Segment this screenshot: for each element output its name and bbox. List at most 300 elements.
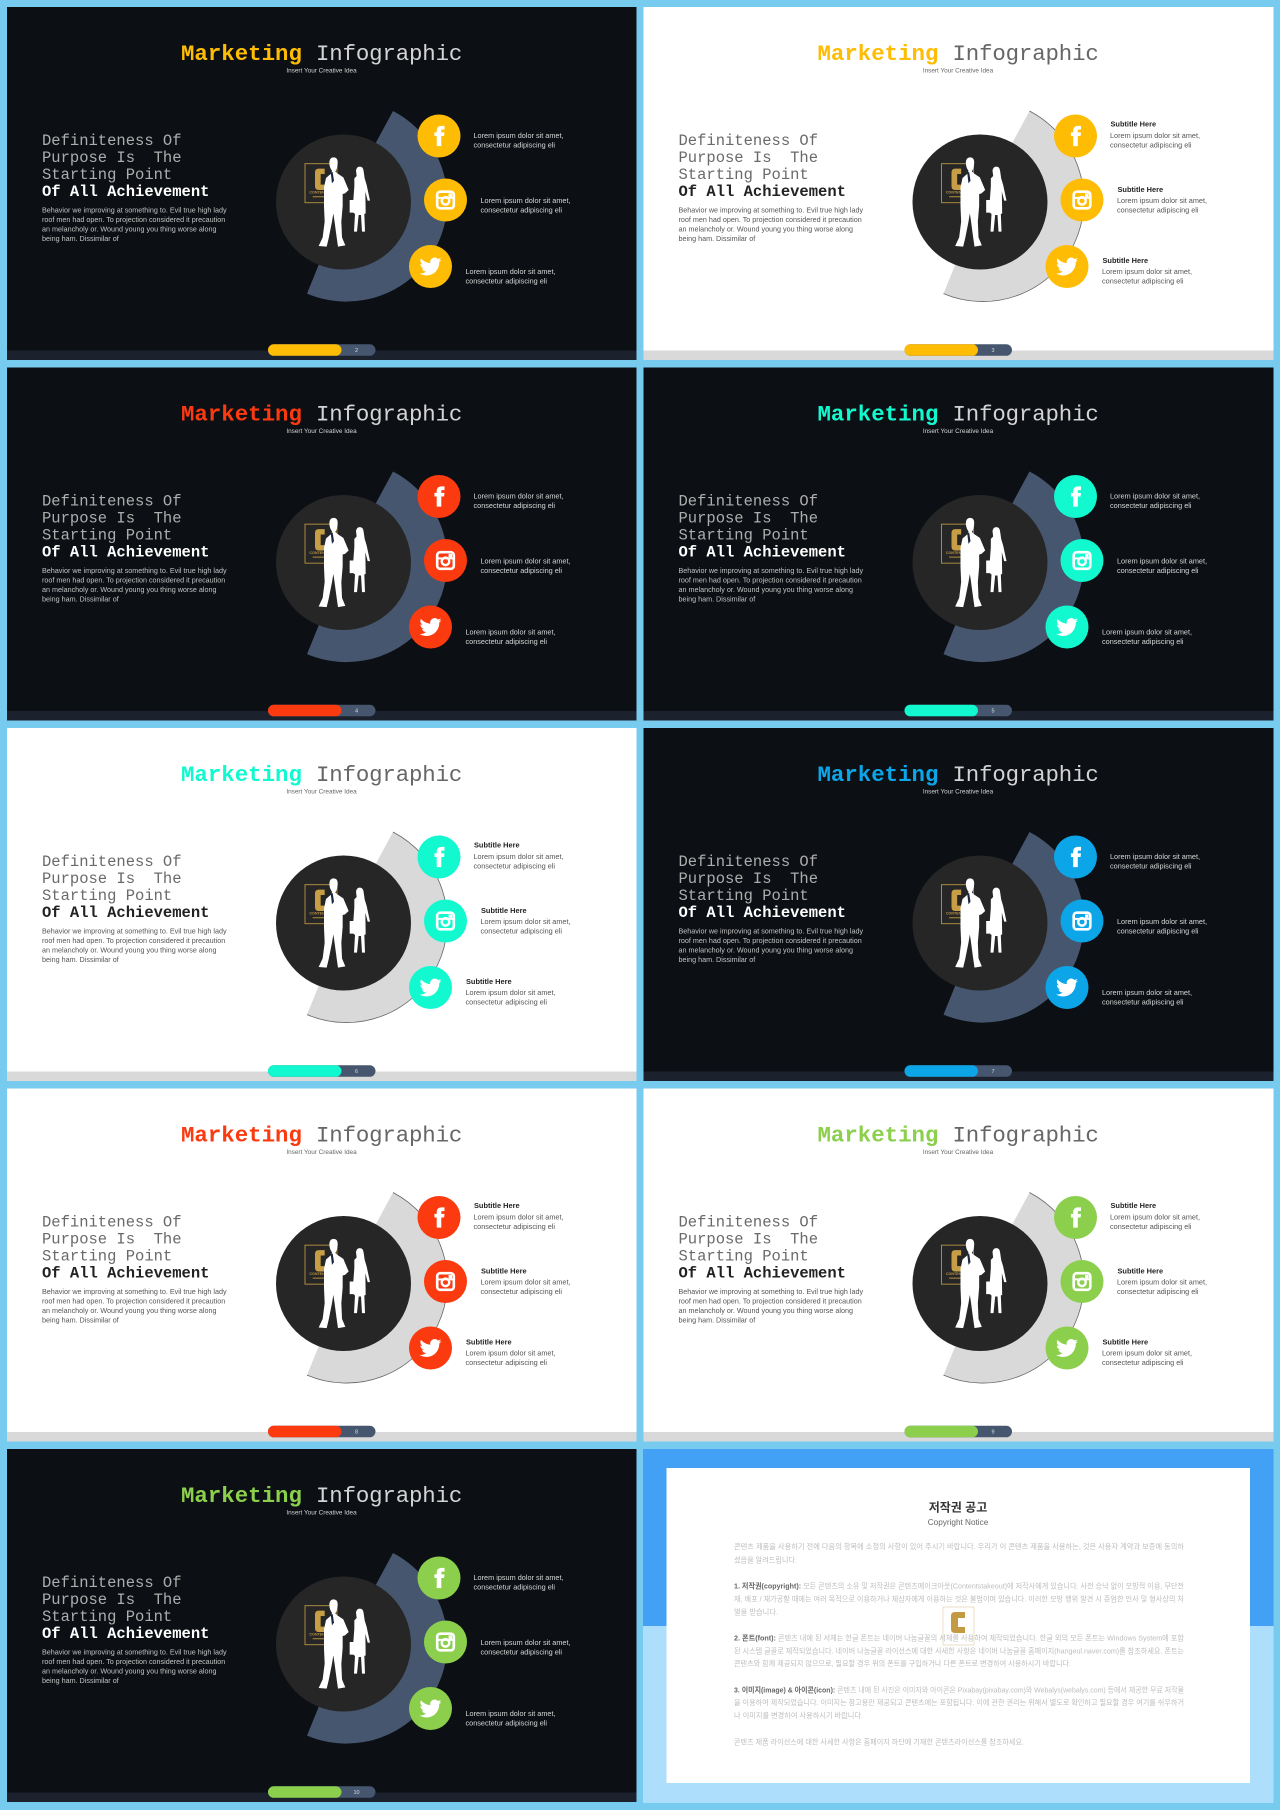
- title: Marketing: [818, 402, 938, 428]
- centre circle with people: [912, 856, 1048, 990]
- body text: Behavior we improving at something to. Evil true high lady: [678, 206, 863, 214]
- title: [818, 1122, 1099, 1156]
- item text 3: [1102, 256, 1192, 286]
- body text: Behavior we improving at something to. Evil true high lady: [42, 1287, 227, 1296]
- page pill: [268, 344, 376, 356]
- item text 3: [1102, 988, 1192, 1006]
- page pill: [268, 705, 376, 716]
- item text 3: Lorem ipsum dolor sit amet,: [466, 267, 556, 276]
- item text 2: Subtitle Here: [1118, 1266, 1163, 1276]
- page pill: [904, 705, 1012, 716]
- item text 1: consectetur adipiscing eli: [1110, 140, 1192, 150]
- arc sector: [307, 111, 447, 302]
- page pill: 7: [991, 1069, 995, 1075]
- item text 1: Lorem ipsum dolor sit amet,: [1110, 492, 1200, 500]
- title: [818, 402, 1099, 435]
- item text 3: Subtitle Here: [1102, 256, 1148, 265]
- body text: [42, 1648, 227, 1685]
- body text: roof men had open. To projection considered it precaution: [42, 1296, 225, 1306]
- item text 2: consectetur adipiscing eli: [1117, 926, 1199, 936]
- notice title: Copyright Notice: [928, 1518, 989, 1527]
- body text: an melancholy or. Wound young you thing worse along: [42, 585, 216, 594]
- item text 1: Lorem ipsum dolor sit amet,: [1110, 852, 1200, 861]
- item text 1: [474, 492, 564, 510]
- body text: being ham. Dissimilar of: [42, 1676, 119, 1685]
- title: Marketing: [181, 402, 302, 428]
- page pill: 4: [355, 708, 358, 714]
- slide 10: copyright notice: [643, 1449, 1274, 1803]
- icon: instagram: [424, 539, 467, 582]
- body text: [678, 566, 863, 604]
- item text 1: [1110, 492, 1200, 510]
- heading text: [678, 492, 846, 562]
- item text 2: consectetur adipiscing eli: [1117, 206, 1199, 214]
- notice body: 3. 이미지(image) & 아이콘(icon): 콘텐츠 내에 된 사진은 이미지와 아이콘은 Pixabay(pixabay.com)와 Webalys(webalys.com) 등에서 제공한 무료 저작물: [734, 1684, 1184, 1694]
- heading text: Of All Achievement: [678, 544, 846, 562]
- item text 1: consectetur adipiscing eli: [474, 140, 555, 150]
- icon: twitter: [1046, 1326, 1088, 1370]
- item text 2: [480, 556, 571, 575]
- page pill: 8: [355, 1430, 358, 1436]
- body text: [678, 1287, 863, 1324]
- body text: an melancholy or. Wound young you thing worse along: [42, 224, 216, 234]
- notice title: 저작권 공고: [929, 1500, 987, 1514]
- icon: facebook: [1054, 1196, 1097, 1239]
- title: [181, 1122, 462, 1156]
- icon: twitter: [1046, 245, 1088, 288]
- item text 1: Subtitle Here: [474, 1201, 520, 1210]
- body text: being ham. Dissimilar of: [678, 594, 755, 604]
- title: [181, 762, 462, 796]
- title: [818, 762, 1099, 796]
- item text 2: [1117, 185, 1207, 214]
- heading text: [42, 1214, 209, 1282]
- icon: instagram: [1060, 900, 1104, 942]
- icon: twitter: [409, 1687, 452, 1730]
- body text: Behavior we improving at something to. Evil true high lady: [42, 926, 227, 936]
- title: Marketing: [181, 762, 302, 788]
- slide 7: light red: [7, 1088, 636, 1442]
- body text: roof men had open. To projection considered it precaution: [678, 936, 862, 945]
- item text 3: consectetur adipiscing eli: [466, 276, 547, 286]
- title: Insert Your Creative Idea: [923, 428, 994, 435]
- item text 1: Lorem ipsum dolor sit amet,: [474, 492, 564, 500]
- notice body: 콘텐츠 제품을 사용하기 전에 다음의 항목에 소정의 사항이 있어 주시기 바랍니다. 우리가 이 콘텐츠 제품을 사용하는, 것은 사용자 계약과 보증에 동의하: [734, 1541, 1184, 1551]
- item text 1: Lorem ipsum dolor sit amet,: [1110, 1212, 1200, 1222]
- heading text: Purpose Is The: [42, 870, 182, 888]
- notice body: 콘텐츠와 함께 제공되지 않으므로, 필요할 경우 위의 폰트를 구입하거나 다른 폰트로 변경하여 사용하시기 바랍니다.: [734, 1658, 1071, 1668]
- heading text: [678, 132, 846, 201]
- item text 2: Lorem ipsum dolor sit amet,: [480, 1278, 571, 1286]
- page pill: 9: [991, 1430, 995, 1436]
- page pill: [904, 1065, 1012, 1077]
- item text 3: Lorem ipsum dolor sit amet,: [466, 628, 556, 636]
- heading text: [42, 853, 209, 922]
- heading text: Definiteness Of: [42, 1574, 182, 1592]
- item text 2: consectetur adipiscing eli: [480, 566, 562, 575]
- icon: instagram: [1060, 539, 1104, 582]
- item text 3: [1102, 1338, 1192, 1367]
- title: Insert Your Creative Idea: [923, 68, 994, 74]
- notice body: 벌을 받습니다.: [734, 1606, 778, 1616]
- item text 1: consectetur adipiscing eli: [1110, 862, 1192, 870]
- item text 1: Lorem ipsum dolor sit amet,: [474, 131, 564, 140]
- notice body: 콘텐츠 제품 라이선스에 대한 사세한 사항은 홈페이지 하단에 기재한 콘텐츠라이선스를 참조하세요.: [734, 1736, 1024, 1746]
- heading text: Starting Point: [42, 1608, 172, 1626]
- icon: facebook: [1054, 114, 1097, 158]
- heading text: Purpose Is The: [42, 149, 182, 167]
- icon: facebook: [1054, 475, 1097, 518]
- item text 3: Subtitle Here: [466, 977, 512, 986]
- heading text: Purpose Is The: [678, 870, 818, 888]
- heading text: [42, 492, 209, 562]
- heading text: Definiteness Of: [678, 132, 818, 150]
- item text 3: Lorem ipsum dolor sit amet,: [1102, 267, 1192, 276]
- body text: being ham. Dissimilar of: [678, 234, 755, 243]
- icon: facebook: [418, 1556, 460, 1600]
- heading text: Definiteness Of: [42, 492, 182, 510]
- heading text: Purpose Is The: [42, 510, 182, 528]
- page pill: 3: [991, 348, 995, 354]
- title: Infographic: [316, 402, 462, 428]
- item text 2: [480, 196, 571, 214]
- icon: facebook: [418, 836, 460, 878]
- body text: being ham. Dissimilar of: [42, 234, 119, 243]
- slide 8: light green: [644, 1088, 1274, 1442]
- item text 1: [474, 1201, 564, 1231]
- item text 3: Lorem ipsum dolor sit amet,: [1102, 628, 1192, 636]
- notice body: 된 시스템 글꼴로 제작되었습니다. 네이버 나눔글꼴 라이선스에 대한 사세한 사항은 네이버 나눔글꼴 홈페이지(hangeul.naver.com)를 참조하세요. 폰트는: [734, 1646, 1184, 1656]
- heading text: Of All Achievement: [42, 904, 209, 922]
- notice body: [734, 1541, 1184, 1746]
- icon: instagram: [1060, 178, 1104, 222]
- arc sector: [944, 472, 1084, 662]
- item text 1: [1110, 852, 1200, 870]
- body text: being ham. Dissimilar of: [42, 955, 119, 964]
- item text 2: [480, 1638, 571, 1656]
- arc sector: [307, 1192, 447, 1383]
- title: [181, 41, 462, 74]
- heading text: Definiteness Of: [678, 1214, 818, 1232]
- page pill: [268, 1065, 376, 1077]
- item text 3: consectetur adipiscing eli: [466, 1358, 547, 1367]
- item text 1: Lorem ipsum dolor sit amet,: [474, 1573, 564, 1582]
- icon: instagram: [424, 178, 467, 222]
- title: Insert Your Creative Idea: [286, 1510, 357, 1516]
- title: Marketing: [818, 1122, 938, 1148]
- item text 3: Lorem ipsum dolor sit amet,: [1102, 1348, 1192, 1358]
- heading text: Definiteness Of: [678, 492, 818, 510]
- title: Insert Your Creative Idea: [923, 1149, 994, 1156]
- item text 3: consectetur adipiscing eli: [466, 637, 547, 646]
- heading text: Starting Point: [42, 166, 172, 184]
- page pill: [904, 1426, 1012, 1437]
- heading text: Starting Point: [42, 526, 172, 544]
- body text: roof men had open. To projection considered it precaution: [42, 576, 225, 584]
- item text 2: Lorem ipsum dolor sit amet,: [480, 917, 571, 926]
- body text: an melancholy or. Wound young you thing worse along: [42, 1306, 216, 1315]
- title: Insert Your Creative Idea: [286, 788, 357, 796]
- heading text: Purpose Is The: [678, 149, 818, 167]
- item text 3: Subtitle Here: [466, 1338, 512, 1346]
- slide 2: light yellow: [644, 7, 1274, 360]
- item text 3: [466, 977, 556, 1006]
- slide 3: dark red: [7, 368, 636, 720]
- item text 3: Subtitle Here: [1102, 1338, 1148, 1346]
- body text: roof men had open. To projection considered it precaution: [42, 936, 225, 945]
- arc sector: [944, 832, 1084, 1023]
- icon: facebook: [418, 1196, 460, 1239]
- arc sector: [944, 1192, 1084, 1383]
- centre circle with people: [276, 134, 411, 270]
- heading text: Purpose Is The: [678, 510, 818, 528]
- heading text: Starting Point: [42, 887, 172, 905]
- slide 4: dark teal: [644, 368, 1274, 720]
- title: [181, 402, 462, 435]
- heading text: Definiteness Of: [42, 132, 182, 150]
- body text: [678, 926, 863, 964]
- body text: an melancholy or. Wound young you thing worse along: [678, 1306, 853, 1315]
- item text 3: Lorem ipsum dolor sit amet,: [466, 1348, 556, 1358]
- heading text: Starting Point: [678, 166, 809, 184]
- body text: [42, 926, 227, 964]
- heading text: Starting Point: [678, 526, 809, 544]
- item text 2: Lorem ipsum dolor sit amet,: [480, 1638, 571, 1647]
- item text 2: consectetur adipiscing eli: [480, 1648, 562, 1656]
- item text 2: consectetur adipiscing eli: [480, 206, 562, 214]
- item text 3: Lorem ipsum dolor sit amet,: [466, 988, 556, 997]
- body text: Behavior we improving at something to. Evil true high lady: [678, 566, 863, 575]
- item text 2: [480, 906, 571, 936]
- item text 2: [1117, 1266, 1207, 1296]
- slide 1: dark yellow: [7, 7, 636, 360]
- title: Infographic: [952, 762, 1099, 788]
- body text: roof men had open. To projection considered it precaution: [678, 576, 862, 584]
- item text 2: consectetur adipiscing eli: [1117, 566, 1199, 575]
- body text: roof men had open. To projection considered it precaution: [678, 1296, 862, 1306]
- heading text: Starting Point: [678, 1248, 809, 1266]
- item text 3: consectetur adipiscing eli: [1102, 1358, 1184, 1367]
- heading text: Of All Achievement: [42, 544, 209, 562]
- item text 3: consectetur adipiscing eli: [1102, 276, 1184, 286]
- icon: instagram: [424, 900, 467, 942]
- icon: twitter: [409, 966, 452, 1009]
- item text 3: consectetur adipiscing eli: [466, 998, 547, 1006]
- notice body: 나 이미지를 변경하여 사용하시기 바랍니다.: [734, 1710, 863, 1720]
- heading text: Of All Achievement: [42, 1625, 209, 1643]
- notice title: [928, 1500, 989, 1527]
- item text 1: [474, 131, 564, 150]
- slide 6: dark blue: [644, 728, 1274, 1081]
- heading text: [678, 853, 846, 922]
- item text 2: [480, 1266, 571, 1296]
- body text: an melancholy or. Wound young you thing worse along: [678, 946, 853, 954]
- centre circle with people: [912, 134, 1048, 270]
- icon: instagram: [424, 1260, 467, 1303]
- title: Infographic: [316, 1122, 462, 1148]
- title: Infographic: [316, 41, 462, 67]
- item text 2: Subtitle Here: [481, 906, 527, 915]
- body text: [42, 206, 227, 243]
- centre circle with people: [276, 495, 411, 630]
- item text 1: [1110, 120, 1200, 150]
- body text: roof men had open. To projection considered it precaution: [678, 215, 862, 224]
- page pill: 5: [991, 708, 995, 714]
- body text: being ham. Dissimilar of: [678, 955, 755, 964]
- heading text: Of All Achievement: [42, 1264, 209, 1282]
- notice body: 셨음을 알려드립니다.: [734, 1554, 797, 1564]
- item text 3: consectetur adipiscing eli: [1102, 637, 1184, 646]
- body text: Behavior we improving at something to. Evil true high lady: [678, 1287, 863, 1296]
- title: Infographic: [952, 402, 1099, 428]
- icon: facebook: [418, 114, 460, 158]
- item text 1: Subtitle Here: [1110, 1201, 1156, 1210]
- item text 3: Lorem ipsum dolor sit amet,: [466, 1709, 556, 1718]
- body text: Behavior we improving at something to. Evil true high lady: [42, 566, 227, 575]
- icon: twitter: [409, 245, 452, 288]
- notice body: 재, 배포 / 재가공할 때에는 여러 목적으로 이용하거나 제삼자에게 이용하는 것은 불법이며 있습니다. 이러한 모방 행위 발견 시 준엄한 민사 및 형사상의 처: [734, 1594, 1184, 1604]
- title: Infographic: [316, 762, 462, 788]
- title: Marketing: [181, 1122, 302, 1148]
- item text 2: Lorem ipsum dolor sit amet,: [1117, 1278, 1207, 1286]
- title: Insert Your Creative Idea: [286, 428, 357, 435]
- slide 5: light teal: [7, 728, 636, 1081]
- heading text: Starting Point: [42, 1248, 172, 1266]
- item text 3: consectetur adipiscing eli: [466, 1718, 547, 1728]
- centre circle with people: [276, 1576, 411, 1712]
- heading text: Definiteness Of: [42, 1214, 182, 1232]
- notice body: 1. 저작권(copyright): 모든 콘텐츠의 소유 및 저작권은 콘텐츠메이크아웃(Contentstakeout)에 저작사에게 있습니다. 사전 승낙 없이 모방적 이용, 무단전: [734, 1580, 1184, 1590]
- body text: being ham. Dissimilar of: [42, 594, 119, 604]
- body text: Behavior we improving at something to. Evil true high lady: [678, 926, 863, 936]
- arc sector: [307, 832, 447, 1023]
- item text 1: [1110, 1201, 1200, 1231]
- title: Infographic: [952, 41, 1099, 67]
- body text: [42, 566, 227, 604]
- arc sector: [944, 111, 1084, 302]
- heading text: Of All Achievement: [678, 1264, 846, 1282]
- item text 2: [1117, 556, 1207, 575]
- item text 1: consectetur adipiscing eli: [474, 862, 555, 870]
- item text 1: Subtitle Here: [1110, 120, 1156, 128]
- item text 1: [474, 1573, 564, 1592]
- icon: instagram: [424, 1620, 467, 1664]
- page pill: [904, 344, 1012, 356]
- notice body: 을 이용하여 제작되었습니다. 이미지는 참고용만 제공되고 콘텐츠에는 포함됩니다. 이에 관한 권리는 위해서 별도로 확인하고 필요할 경우 여기를 쉬우하거: [734, 1697, 1184, 1707]
- page pill: [268, 1426, 376, 1437]
- icon: facebook: [418, 475, 460, 518]
- item text 3: Lorem ipsum dolor sit amet,: [1102, 988, 1192, 997]
- item text 2: Lorem ipsum dolor sit amet,: [1117, 196, 1207, 205]
- icon: twitter: [409, 606, 452, 648]
- heading text: [42, 1574, 209, 1643]
- heading text: Definiteness Of: [678, 853, 818, 871]
- centre circle with people: [276, 856, 411, 990]
- body text: an melancholy or. Wound young you thing worse along: [42, 946, 216, 954]
- item text 1: consectetur adipiscing eli: [474, 501, 555, 510]
- item text 2: [1117, 917, 1207, 936]
- notice logo: [943, 1607, 974, 1645]
- title: Marketing: [818, 41, 938, 67]
- title: Insert Your Creative Idea: [923, 788, 994, 796]
- centre circle with people: [912, 1216, 1048, 1351]
- heading text: [42, 132, 209, 201]
- title: [181, 1483, 462, 1516]
- title: Marketing: [818, 762, 938, 788]
- heading text: Purpose Is The: [42, 1591, 182, 1609]
- item text 1: Lorem ipsum dolor sit amet,: [474, 852, 564, 861]
- item text 3: [466, 267, 556, 286]
- item text 2: Lorem ipsum dolor sit amet,: [480, 556, 571, 566]
- item text 1: consectetur adipiscing eli: [1110, 501, 1192, 510]
- centre circle with people: [912, 495, 1048, 630]
- item text 3: [466, 628, 556, 646]
- slide 9: dark green: [7, 1449, 636, 1802]
- icon: twitter: [1046, 606, 1088, 648]
- arc sector: [307, 1553, 447, 1744]
- title: Marketing: [181, 41, 302, 67]
- heading text: Definiteness Of: [42, 853, 182, 871]
- body text: [42, 1287, 227, 1324]
- item text 2: Subtitle Here: [1118, 185, 1163, 194]
- item text 3: [1102, 628, 1192, 646]
- page pill: 2: [355, 348, 358, 354]
- title: [818, 41, 1099, 74]
- body text: being ham. Dissimilar of: [678, 1316, 755, 1324]
- icon: facebook: [1054, 836, 1097, 878]
- heading text: [678, 1214, 846, 1282]
- item text 3: consectetur adipiscing eli: [1102, 998, 1184, 1006]
- heading text: Starting Point: [678, 887, 809, 905]
- body text: an melancholy or. Wound young you thing worse along: [678, 224, 853, 234]
- heading text: Of All Achievement: [42, 183, 209, 201]
- body text: Behavior we improving at something to. Evil true high lady: [42, 206, 227, 214]
- page pill: 6: [355, 1069, 358, 1075]
- item text 2: consectetur adipiscing eli: [480, 1287, 562, 1296]
- body text: being ham. Dissimilar of: [42, 1316, 119, 1324]
- icon: twitter: [1046, 966, 1088, 1009]
- page pill: [268, 1786, 376, 1798]
- item text 2: Subtitle Here: [481, 1266, 527, 1276]
- item text 1: Subtitle Here: [474, 840, 520, 850]
- page pill: 10: [353, 1790, 360, 1796]
- heading text: Of All Achievement: [678, 904, 846, 922]
- item text 2: Lorem ipsum dolor sit amet,: [1117, 556, 1207, 566]
- centre circle with people: [276, 1216, 411, 1351]
- arc sector: [307, 472, 447, 662]
- item text 3: [466, 1709, 556, 1728]
- item text 1: consectetur adipiscing eli: [1110, 1222, 1192, 1231]
- title: Marketing: [181, 1483, 302, 1509]
- item text 1: consectetur adipiscing eli: [474, 1582, 555, 1592]
- item text 2: Lorem ipsum dolor sit amet,: [1117, 917, 1207, 926]
- item text 1: consectetur adipiscing eli: [474, 1222, 555, 1231]
- body text: Behavior we improving at something to. Evil true high lady: [42, 1648, 227, 1656]
- item text 2: consectetur adipiscing eli: [480, 926, 562, 936]
- body text: roof men had open. To projection considered it precaution: [42, 215, 225, 224]
- heading text: Of All Achievement: [678, 183, 846, 201]
- item text 1: [474, 840, 564, 870]
- title: Infographic: [316, 1483, 462, 1509]
- body text: roof men had open. To projection considered it precaution: [42, 1657, 225, 1666]
- item text 3: [466, 1338, 556, 1367]
- title: Insert Your Creative Idea: [286, 1149, 357, 1156]
- heading text: Purpose Is The: [678, 1230, 818, 1248]
- icon: twitter: [409, 1326, 452, 1370]
- body text: an melancholy or. Wound young you thing worse along: [42, 1666, 216, 1676]
- title: Infographic: [952, 1122, 1099, 1148]
- item text 2: consectetur adipiscing eli: [1117, 1287, 1199, 1296]
